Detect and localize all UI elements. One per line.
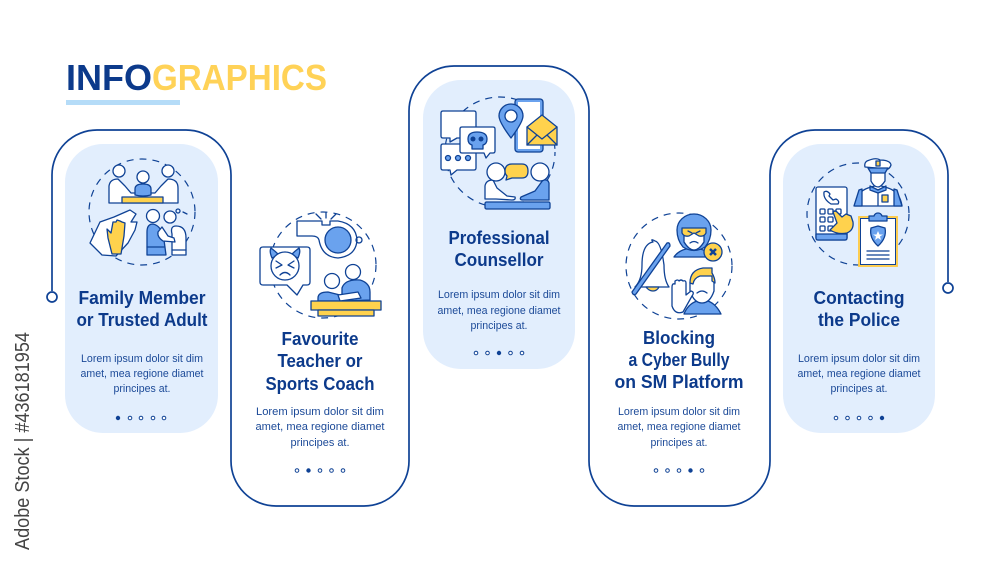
body text: amet, mea regione diamet xyxy=(256,421,384,433)
pagination dots xyxy=(295,468,345,473)
body text: principes at. xyxy=(290,437,350,449)
panel: contacting the police: the Police xyxy=(818,310,900,330)
panel: favourite teacher: Teacher or xyxy=(278,351,362,371)
panel: professional counsellor: Counsellor xyxy=(454,250,544,270)
panel: contacting the police xyxy=(783,144,935,433)
body text xyxy=(798,353,920,395)
body text: Lorem ipsum dolor sit dim xyxy=(438,289,560,301)
panel: blocking a cyber bully: on SM Platform xyxy=(614,372,744,392)
icon: messages, contact and counselling xyxy=(441,97,557,209)
body text xyxy=(256,406,384,449)
panel: favourite teacher: Sports Coach xyxy=(266,374,374,394)
heading: Professional xyxy=(448,228,550,248)
body text xyxy=(618,406,740,449)
body text: Lorem ipsum dolor sit dim xyxy=(256,406,384,418)
body text: amet, mea regione diamet xyxy=(618,421,740,433)
icon: whistle, angry bubble and students xyxy=(260,212,381,318)
panel: favourite teacher xyxy=(256,212,384,473)
pagination dots xyxy=(116,416,166,420)
heading: Blocking xyxy=(643,328,715,348)
body text: Lorem ipsum dolor sit dim xyxy=(81,353,203,365)
panel: blocking a cyber bully: a Cyber Bully xyxy=(628,350,730,370)
body text: principes at. xyxy=(830,383,888,395)
panel: family member: or Trusted Adult xyxy=(76,310,208,330)
icon: family and trusted adult xyxy=(89,159,195,265)
title: INFO xyxy=(66,57,152,98)
icon: blocking bully xyxy=(626,213,732,319)
pagination dots xyxy=(474,351,524,355)
body text: Lorem ipsum dolor sit dim xyxy=(798,353,920,365)
panel: blocking a cyber bully xyxy=(614,213,744,473)
body text: principes at. xyxy=(470,320,528,332)
heading: Family Member xyxy=(78,288,206,308)
title: GRAPHICS xyxy=(152,57,327,98)
stock id vertical text: Adobe Stock | #436181954 xyxy=(12,332,34,550)
pagination dots xyxy=(834,416,884,420)
body text: amet, mea regione diamet xyxy=(438,305,560,317)
body text: principes at. xyxy=(114,383,170,395)
panel: professional counsellor xyxy=(423,80,575,369)
body text xyxy=(80,353,204,395)
title underline xyxy=(66,100,180,105)
icon: phone, officer and report xyxy=(807,159,909,266)
title xyxy=(66,57,327,98)
heading: Contacting xyxy=(814,288,904,308)
panel: family member xyxy=(65,144,218,433)
body text: principes at. xyxy=(650,437,708,449)
body text: amet, mea regione diamet xyxy=(798,368,920,380)
pagination dots xyxy=(654,468,704,473)
heading: Favourite xyxy=(282,329,358,349)
serpentine outline connecting panels xyxy=(47,66,953,506)
body text: Lorem ipsum dolor sit dim xyxy=(618,406,740,418)
body text xyxy=(438,289,560,332)
body text: amet, mea regione diamet xyxy=(80,368,204,380)
